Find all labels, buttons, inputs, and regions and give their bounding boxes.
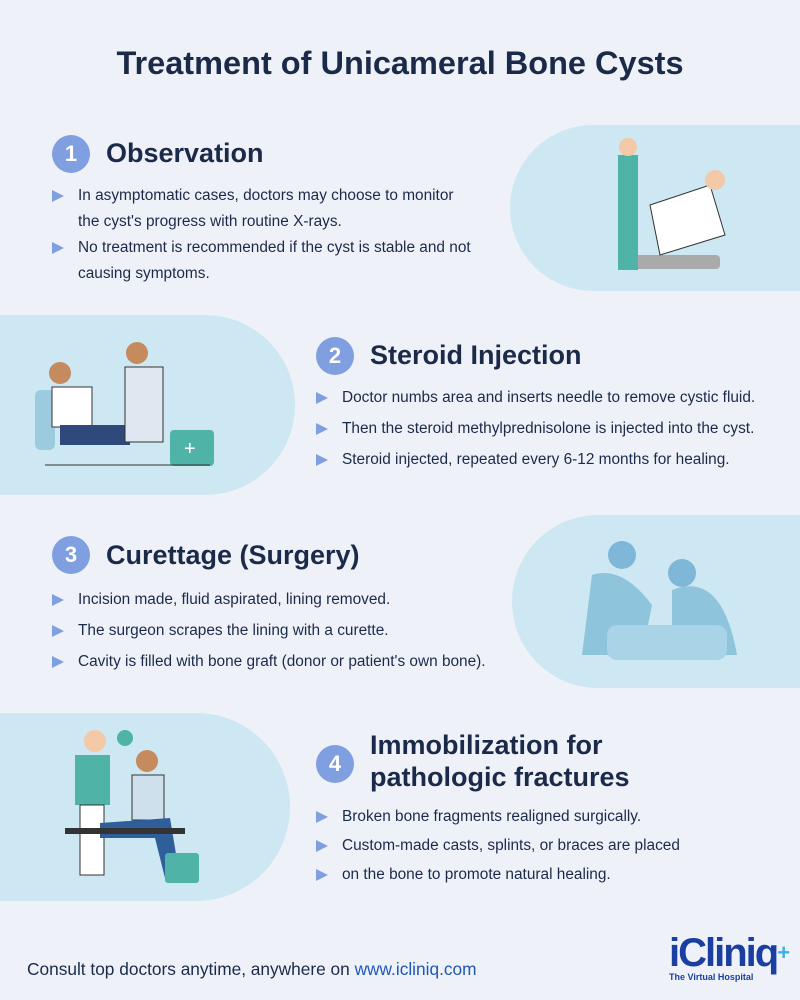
panel: steroid injection xyxy=(0,315,755,495)
illustration blob 3 xyxy=(512,515,800,688)
bullets 4: on the bone to promote natural healing. xyxy=(342,866,611,883)
panel: curettage xyxy=(52,515,800,688)
badge 1: 1 xyxy=(65,141,77,166)
illustration blob 1 xyxy=(510,125,800,291)
bullets 3: The surgeon scrapes the lining with a curette. xyxy=(78,622,389,639)
heading 1: Observation xyxy=(106,138,264,168)
logo: iCliniq+ xyxy=(669,931,788,975)
badge 3 xyxy=(52,536,90,574)
badge 4: 4 xyxy=(329,751,341,776)
illustration blob 4 xyxy=(0,713,290,901)
bullets 2: Doctor numbs area and inserts needle to remove cystic fluid. xyxy=(342,389,755,406)
heading 4: Immobilization for xyxy=(370,730,602,760)
bullets 2: Steroid injected, repeated every 6-12 months for healing. xyxy=(342,451,730,468)
bullets 3: Cavity is filled with bone graft (donor or patient's own bone). xyxy=(78,653,486,670)
bullets 2 xyxy=(316,389,755,468)
panel: immobilization xyxy=(0,713,680,901)
bullets 3 xyxy=(52,591,486,670)
bullets 1 xyxy=(52,187,471,282)
badge 4 xyxy=(316,745,354,783)
heading 3: Curettage (Surgery) xyxy=(106,540,360,570)
panel: observation xyxy=(52,125,800,291)
bullets 1: No treatment is recommended if the cyst is stable and not causing symptoms. xyxy=(78,239,471,282)
bullets 3: Incision made, fluid aspirated, lining removed. xyxy=(78,591,390,608)
bullets 4 xyxy=(316,808,680,883)
bullets 4: Custom-made casts, splints, or braces are placed xyxy=(342,837,680,854)
heading 2: Steroid Injection xyxy=(370,340,582,370)
badge 2 xyxy=(316,337,354,375)
heading 4 xyxy=(370,730,630,792)
badge 1 xyxy=(52,135,90,173)
bullets 4: Broken bone fragments realigned surgically. xyxy=(342,808,641,825)
illustration blob 2 xyxy=(0,315,295,495)
bullets 2: Then the steroid methylprednisolone is injected into the cyst. xyxy=(342,420,754,437)
illustration blob 2: + xyxy=(184,438,196,460)
badge 2: 2 xyxy=(329,343,341,368)
badge 3: 3 xyxy=(65,542,77,567)
title: Treatment of Unicameral Bone Cysts xyxy=(116,45,684,81)
bullets 1: In asymptomatic cases, doctors may choose to monitor the cyst's progress with routine X-rays. xyxy=(78,187,454,230)
logo: The Virtual Hospital xyxy=(669,972,753,982)
footer text: Consult top doctors anytime, anywhere on www.icliniq.com xyxy=(27,959,477,979)
heading 4: pathologic fractures xyxy=(370,762,630,792)
